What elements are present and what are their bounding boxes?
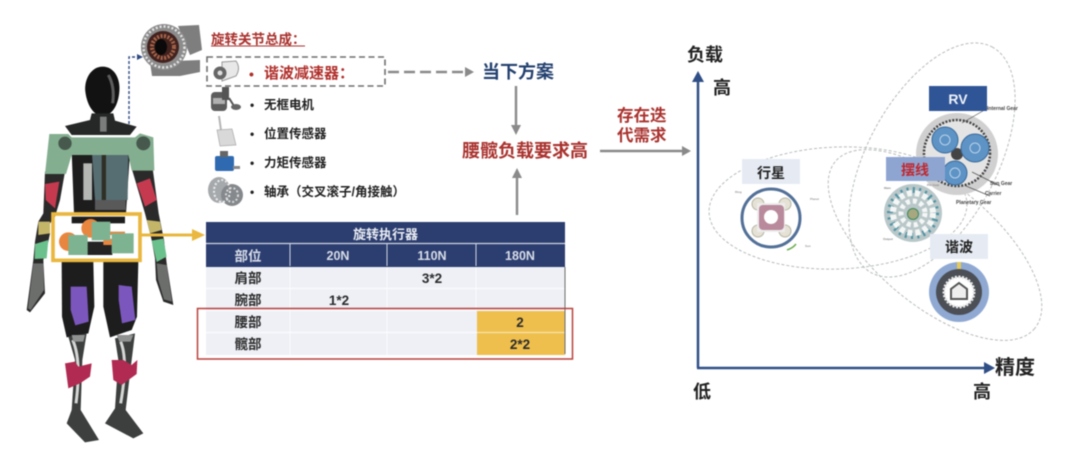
harmonic diagram [929, 262, 989, 322]
axis labels: 负载 [687, 45, 723, 65]
arrow: robot to table [141, 229, 205, 241]
table: rotary actuators: 2 [516, 315, 524, 330]
red highlight box [198, 308, 572, 359]
text: iteration need [617, 105, 667, 145]
icon: frameless motor [211, 87, 241, 111]
yellow highlight box [53, 214, 140, 260]
table: rotary actuators: 髋部 [234, 336, 262, 352]
table: rotary actuators: 腰部 [234, 314, 262, 330]
cycloidal diagram: Main [884, 186, 891, 190]
item: bearing: • [250, 185, 254, 199]
arrow: table to requirement [512, 168, 522, 215]
planetary diagram: Sun [805, 244, 811, 248]
component list [208, 87, 405, 206]
dashed arrow: to current solution [388, 67, 474, 77]
label: harmonic [930, 234, 988, 259]
axis labels [687, 45, 1035, 402]
icon: torque sensor [215, 151, 240, 171]
text: iteration need: 存在迭 [617, 105, 667, 125]
robot thighs [62, 262, 138, 337]
icon: position sensor [217, 116, 236, 146]
component list: 轴承（交叉滚子/角接触） [264, 184, 405, 199]
component list: 位置传感器 [264, 126, 327, 141]
robot shoulders and upper arms [45, 133, 154, 174]
RV gear diagram: Planetary Gear [956, 200, 991, 206]
text: waist hip load requirement: 腰髋负载要求高 [462, 140, 588, 161]
planetary diagram: Ring [735, 190, 742, 194]
robot neck and collar [65, 113, 137, 135]
label: planetary [742, 159, 800, 184]
table: rotary actuators [198, 222, 572, 359]
table: rotary actuators: 旋转执行器 [353, 227, 418, 242]
dashed arrow: robot to joint [129, 54, 143, 124]
robot figure [27, 67, 173, 442]
ellipses [707, 16, 1073, 375]
axis labels: 高 [713, 77, 731, 98]
label: cycloidal: 摆线 [901, 162, 929, 178]
dashed box: harmonic reducer: 谐波减速器： [264, 64, 354, 82]
component list: 力矩传感器 [264, 155, 327, 170]
text: harmonic reducer: • [249, 66, 254, 82]
text: current solution: 当下方案 [482, 61, 554, 82]
icon: bearing [208, 177, 243, 206]
label: cycloidal [886, 157, 945, 181]
table: rotary actuators: 腕部 [234, 292, 262, 308]
cycloidal diagram: Output [883, 237, 893, 241]
robot waist actuators [59, 217, 134, 255]
robot head [85, 67, 120, 117]
RV gear diagram: Carrier [985, 191, 1001, 197]
table: rotary actuators: 20N [327, 249, 349, 263]
table: rotary actuators: 3*2 [422, 271, 442, 286]
icon: rotary joint assembly [141, 24, 202, 76]
table: rotary actuators: 180N [505, 249, 535, 263]
label: planetary: 行星 [757, 165, 785, 181]
heading: rotary joint assembly: 旋转关节总成： [211, 31, 306, 47]
label: RV [929, 86, 987, 111]
robot lower legs [67, 333, 143, 442]
robot thigh actuators [71, 285, 135, 325]
robot arms [27, 168, 173, 312]
RV gear diagram: Sun Gear [990, 181, 1012, 187]
icon: harmonic reducer [214, 61, 238, 81]
table header [206, 222, 565, 267]
item: torque sensor: • [250, 156, 254, 170]
label: harmonic: 谐波 [945, 239, 973, 255]
robot torso [72, 148, 130, 213]
table: rotary actuators: 110N [417, 249, 447, 263]
item: position sensor: • [250, 127, 254, 141]
dashed box: harmonic reducer [207, 57, 385, 86]
item: frameless motor: • [250, 98, 254, 112]
table: rotary actuators: 2*2 [510, 337, 530, 352]
arrow: current solution to requirement [511, 86, 521, 135]
arrow: to chart [600, 146, 691, 156]
axis labels: 精度 [995, 356, 1035, 379]
planetary diagram [735, 189, 819, 250]
table: rotary actuators: 肩部 [234, 270, 262, 286]
text: iteration need: 代需求 [617, 126, 667, 145]
axis labels: 低 [693, 382, 711, 402]
table body [206, 267, 565, 355]
RV gear diagram [916, 106, 1018, 206]
label: RV: RV [948, 91, 968, 107]
table: rotary actuators: 1*2 [329, 293, 349, 308]
cycloidal diagram [883, 183, 942, 242]
cycloidal diagram: Pin Gear [927, 183, 940, 187]
axes [692, 71, 995, 374]
component list: 无框电机 [264, 97, 315, 112]
planetary diagram: Planet [810, 197, 819, 201]
chart: load vs precision [687, 16, 1073, 402]
RV gear diagram: Internal Gear [987, 106, 1018, 112]
robot knee actuators [65, 360, 137, 388]
axis labels: 高 [973, 381, 991, 402]
table: rotary actuators: 部位 [234, 248, 262, 264]
